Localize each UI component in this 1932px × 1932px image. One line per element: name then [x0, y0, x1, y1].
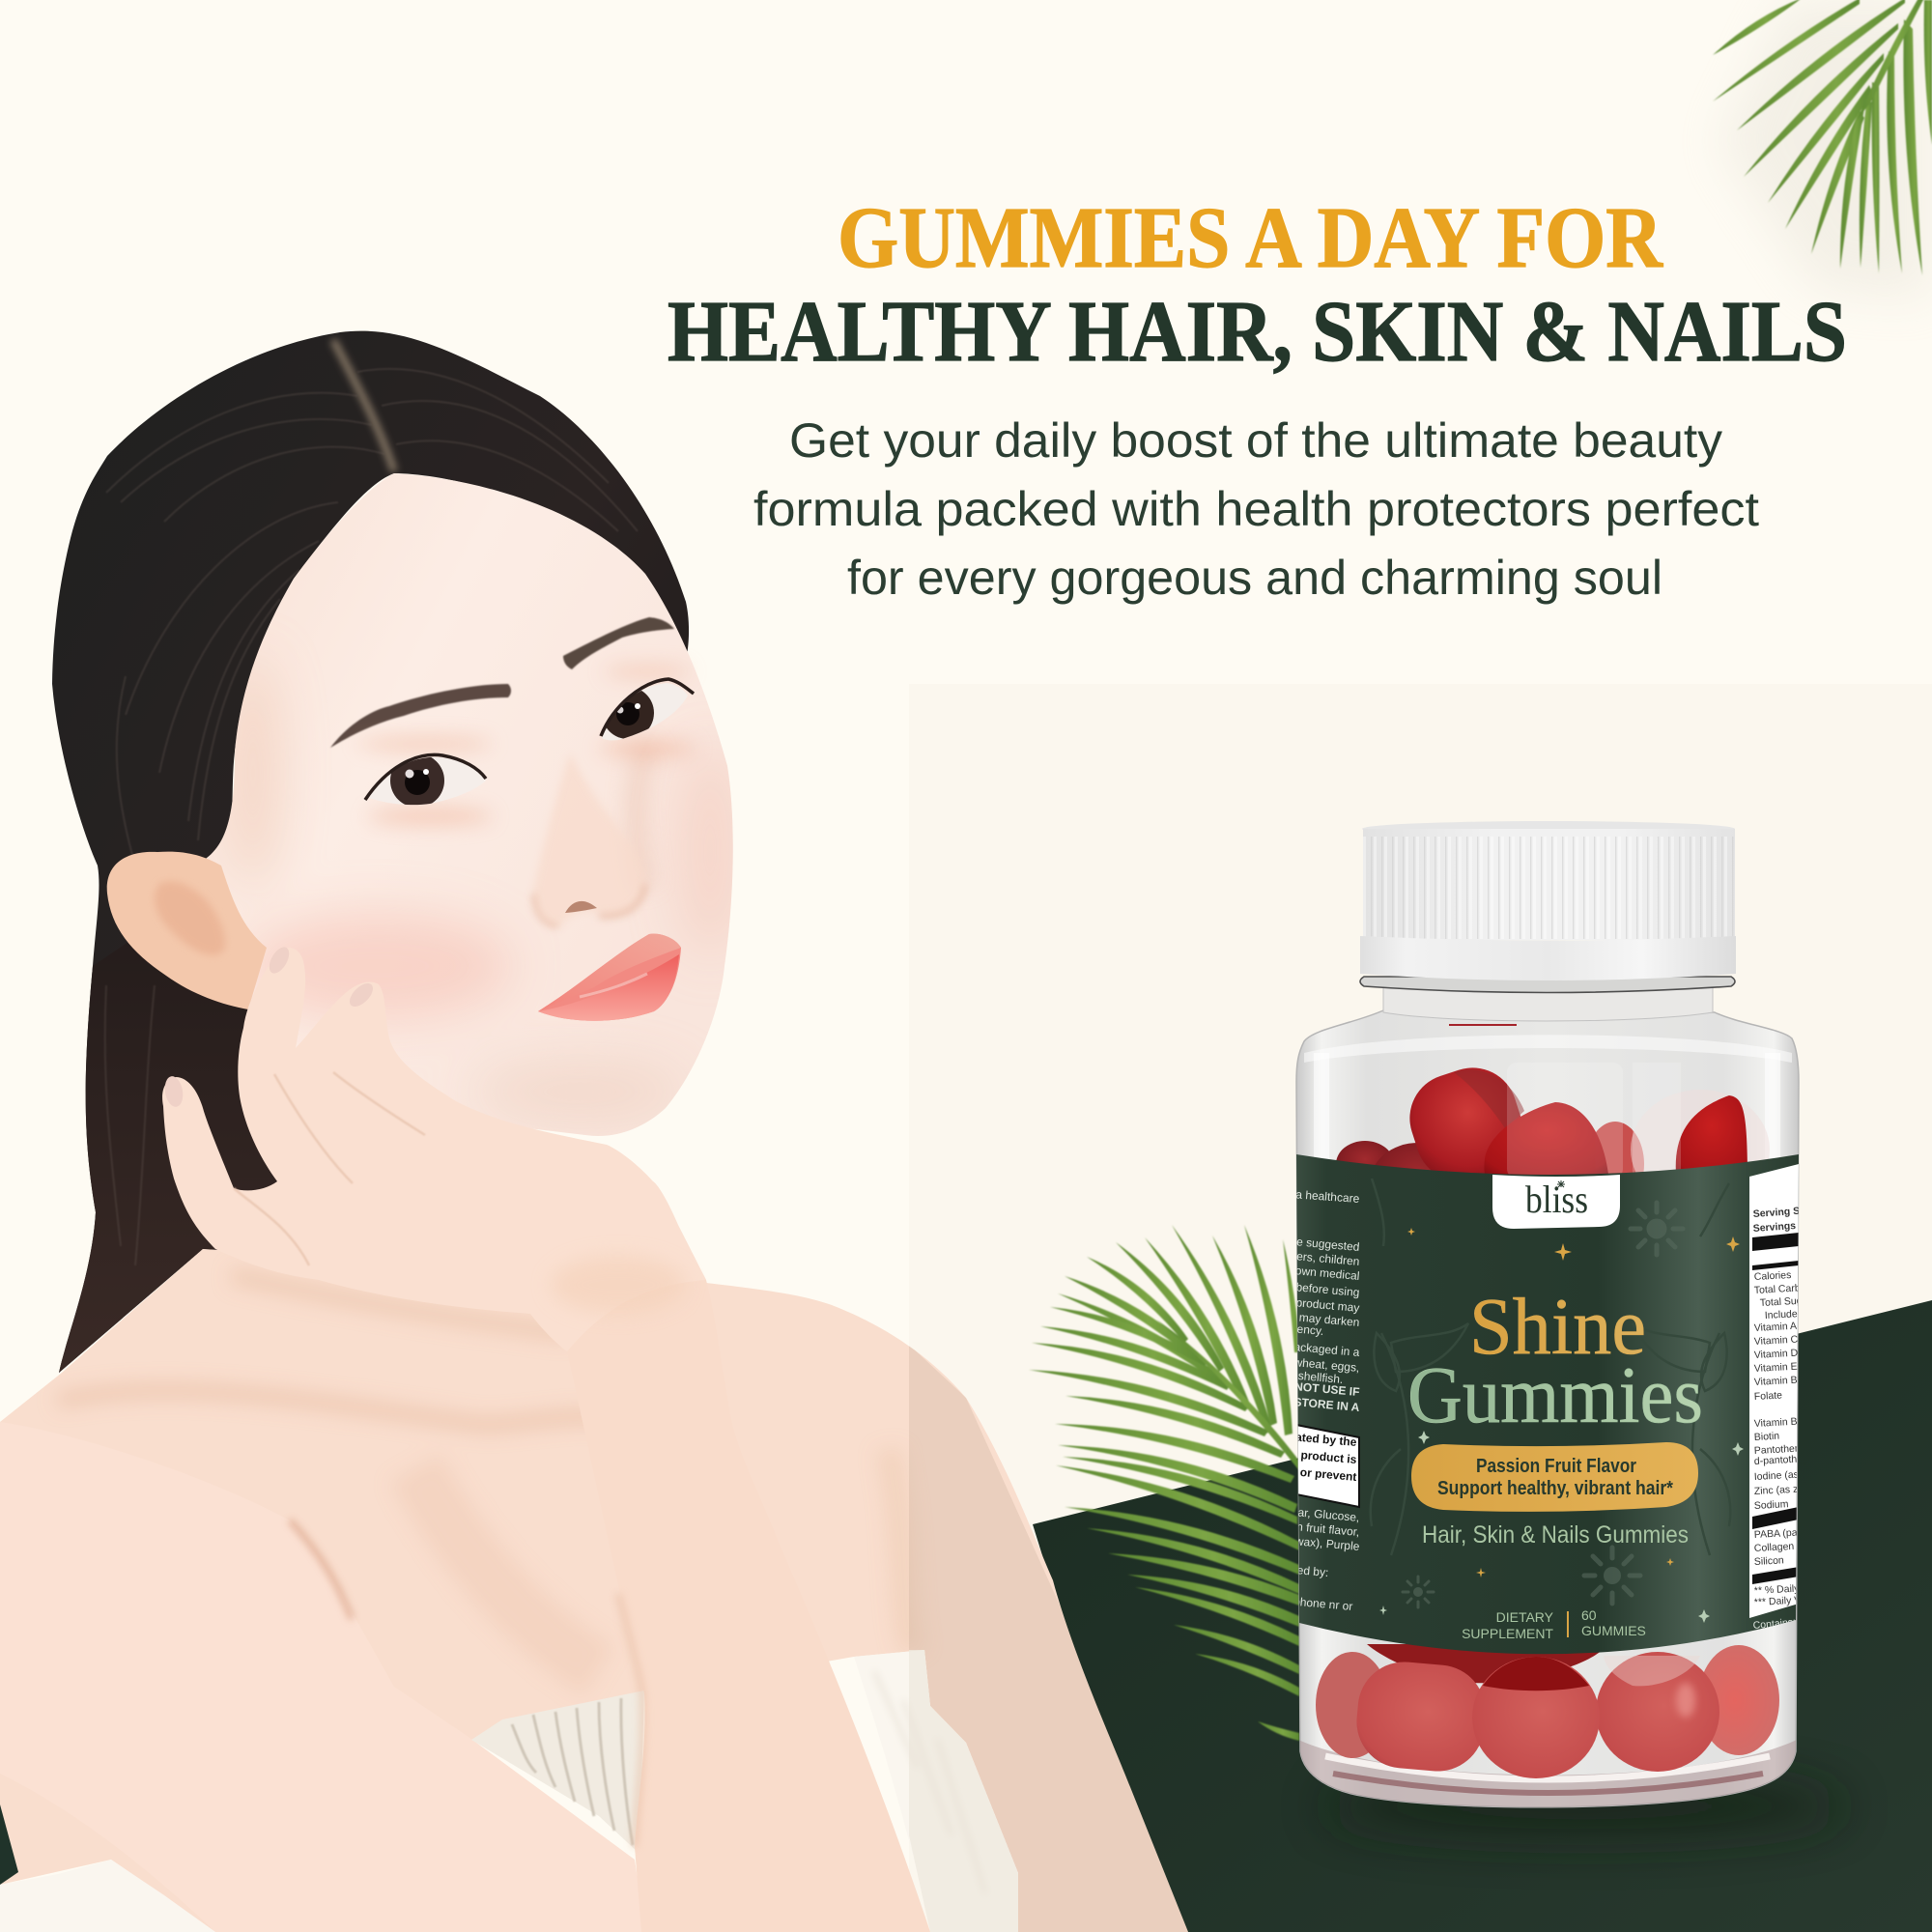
- label: leaf ornaments: [1371, 1179, 1730, 1555]
- label: nutrition facts panel: Vitamin E (as: [1754, 1360, 1814, 1375]
- label: nutrition facts panel: *** Daily Value: [1754, 1593, 1820, 1608]
- label: left side panel text: potency.: [1280, 1321, 1324, 1338]
- subheading paragraph: Get your daily boost of the ultimate beauty: [789, 413, 1722, 468]
- cheek blush and face shading: [230, 657, 744, 1121]
- label: left side panel text: and packaged in a: [1264, 1337, 1360, 1359]
- label: left side panel text: ributed by:: [1274, 1561, 1329, 1579]
- label: nutrition facts panel: d-pantothenate: [1754, 1452, 1823, 1467]
- glass body: [1296, 1010, 1799, 1807]
- label: nutrition facts panel: Contains: Palm: [1752, 1614, 1822, 1632]
- forearm edge shadow: [618, 1594, 643, 1847]
- label: left side panel text: up, Sugar, Glucose,: [1258, 1502, 1360, 1524]
- label: nutrition facts panel: Silicon: [1754, 1554, 1784, 1568]
- label: product name: Gummies: [1407, 1350, 1703, 1440]
- label: left side panel text: , cure or prevent: [1265, 1463, 1357, 1484]
- forearm: [567, 1181, 930, 1932]
- eye: left: [365, 753, 486, 808]
- label: left side panel text: soy, wheat, eggs,: [1270, 1353, 1360, 1375]
- label: dietary supplement: GUMMIES: [1581, 1623, 1646, 1638]
- label: logo tab: bliss: [1525, 1178, 1588, 1221]
- nose: [533, 753, 645, 926]
- label: nutrition facts panel: Sodium: [1754, 1498, 1789, 1512]
- neck: [1383, 987, 1713, 1021]
- label: nutrition facts panel: Total Carbohydrate: [1754, 1280, 1840, 1296]
- ear: [107, 852, 267, 1009]
- label: sun icons: [1403, 1203, 1683, 1607]
- label: nutrition facts panel: ** % Daily Value: [1754, 1581, 1828, 1597]
- label: nutrition facts panel: Vitamin D (as: [1754, 1347, 1815, 1361]
- label: left side panel text: valuated by the: [1272, 1428, 1357, 1449]
- headline: GUMMIES A DAY FOR: [838, 190, 1663, 286]
- label: dietary supplement: [1462, 1607, 1646, 1641]
- subheading paragraph: for every gorgeous and charming soul: [847, 551, 1662, 605]
- dress: bottom left: [0, 1860, 215, 1932]
- gummies: top cluster: [1336, 1056, 1770, 1224]
- bottle shadow: [1323, 1776, 1845, 1837]
- dark green diagonal floor: [1033, 1300, 1932, 1932]
- label: nutrition facts panel: Includes 4 g: [1765, 1307, 1820, 1321]
- label: left side panel text: cian before using: [1271, 1278, 1360, 1299]
- eyebrow: left: [330, 684, 511, 748]
- label: left side panel text: mothers, children: [1270, 1247, 1360, 1268]
- label: product name: Shine: [1469, 1282, 1646, 1372]
- label: nutrition facts panel: Vitamin C (as: [1754, 1333, 1815, 1348]
- label: dietary supplement: SUPPLEMENT: [1462, 1626, 1553, 1641]
- dark wedge under arm: [0, 1804, 18, 1885]
- hand: [162, 944, 706, 1351]
- label: left side panel text: eed the suggested: [1264, 1232, 1360, 1254]
- subheading paragraph: [753, 413, 1759, 605]
- dress: right side: [854, 1650, 1018, 1932]
- label: nutrition facts panel: Vitamin B-12: [1754, 1415, 1812, 1430]
- label: dietary supplement: DIETARY: [1496, 1609, 1554, 1625]
- dress: centre ruffle: [471, 1690, 644, 1854]
- neck ring: [1360, 977, 1735, 993]
- eye: right: [601, 679, 694, 740]
- label: left side panel text: this product may: [1274, 1293, 1360, 1315]
- eye shadow: [357, 666, 696, 825]
- label: nutrition facts panel: Total Sugars: [1760, 1294, 1816, 1309]
- label: flavor pill: Passion Fruit Flavor: [1476, 1456, 1636, 1477]
- label: nutrition facts panel: Collagen (: [1754, 1540, 1801, 1554]
- label: nutrition facts panel: Servings Per C: [1752, 1218, 1826, 1235]
- cap: [1360, 821, 1736, 980]
- label: left side panel text: rs may darken: [1286, 1309, 1360, 1329]
- label: left side panel text: [1296, 1190, 1360, 1610]
- label: dietary supplement: 60: [1581, 1607, 1597, 1623]
- label: sparkle stars: [1407, 1228, 1740, 1577]
- glass highlights and base: [1296, 1024, 1799, 1816]
- label: product name: [1407, 1282, 1703, 1440]
- label: nutrition facts panel: PABA (para: [1754, 1526, 1806, 1541]
- label: left side panel text: uba wax), Purple: [1272, 1532, 1360, 1553]
- headline: [668, 190, 1847, 380]
- label: nutrition facts panel: Pantothenic Acid: [1754, 1441, 1830, 1457]
- label: left side panel text: by a healthcare: [1280, 1186, 1360, 1206]
- panel: tinted product backdrop: [909, 684, 1932, 1932]
- product bottle: [1295, 821, 1800, 1808]
- palm frond: top right: [1713, 0, 1932, 299]
- label: left side panel text: , This product is: [1266, 1445, 1357, 1466]
- eyebrow: right: [563, 617, 674, 669]
- gummies: bottom cluster: [1316, 1644, 1779, 1778]
- label: nutrition facts panel: Vitamin A (as: [1754, 1320, 1813, 1334]
- armpit crease: [290, 1520, 352, 1619]
- face: [166, 473, 733, 1136]
- woman: [0, 331, 1208, 1932]
- label: nutrition facts panel: Biotin: [1754, 1431, 1780, 1443]
- label: subtitle: Hair, Skin & Nails Gummies: [1422, 1521, 1689, 1548]
- label: nutrition facts panel: Serving Size 1 Gu: [1752, 1203, 1839, 1220]
- label: left side panel text: Passion fruit flavor,: [1262, 1517, 1360, 1539]
- label: nutrition facts panel: Folate: [1754, 1389, 1782, 1403]
- palm frond: behind bottle: [1029, 1225, 1301, 1741]
- torso: [0, 1249, 1188, 1932]
- label: [1296, 1154, 1799, 1654]
- subheading paragraph: formula packed with health protectors perfect: [753, 482, 1759, 536]
- label: left side panel text: ad phone nr or: [1277, 1593, 1353, 1613]
- collarbone and chest shading: [58, 1275, 1208, 1932]
- label: nutrition facts panel: Zinc (as zinc: [1754, 1483, 1811, 1497]
- label: left side panel text: known medical: [1283, 1263, 1360, 1283]
- label: left side panel text: SING. STORE IN A: [1259, 1392, 1360, 1414]
- label: flavor pill: Support healthy, vibrant hair*: [1437, 1478, 1673, 1499]
- label: left side panel text: AL. DO NOT USE IF: [1252, 1376, 1360, 1399]
- upper arm: [0, 1422, 645, 1932]
- lips: [538, 934, 681, 1021]
- label: flavor pill: [1411, 1442, 1698, 1512]
- label: left side panel text: known shellfish.: [1261, 1366, 1344, 1386]
- label: nutrition facts panel: Vitamin B-6: [1754, 1374, 1806, 1388]
- label: nutrition facts panel: [1749, 1164, 1799, 1629]
- hair: [52, 331, 689, 1373]
- gummy glass sheen: [1507, 1063, 1681, 1179]
- label: nutrition facts panel: Iodine (as: [1754, 1469, 1799, 1483]
- label: nutrition facts panel: Calories: [1754, 1269, 1792, 1283]
- label: logo tab: [1492, 1175, 1620, 1229]
